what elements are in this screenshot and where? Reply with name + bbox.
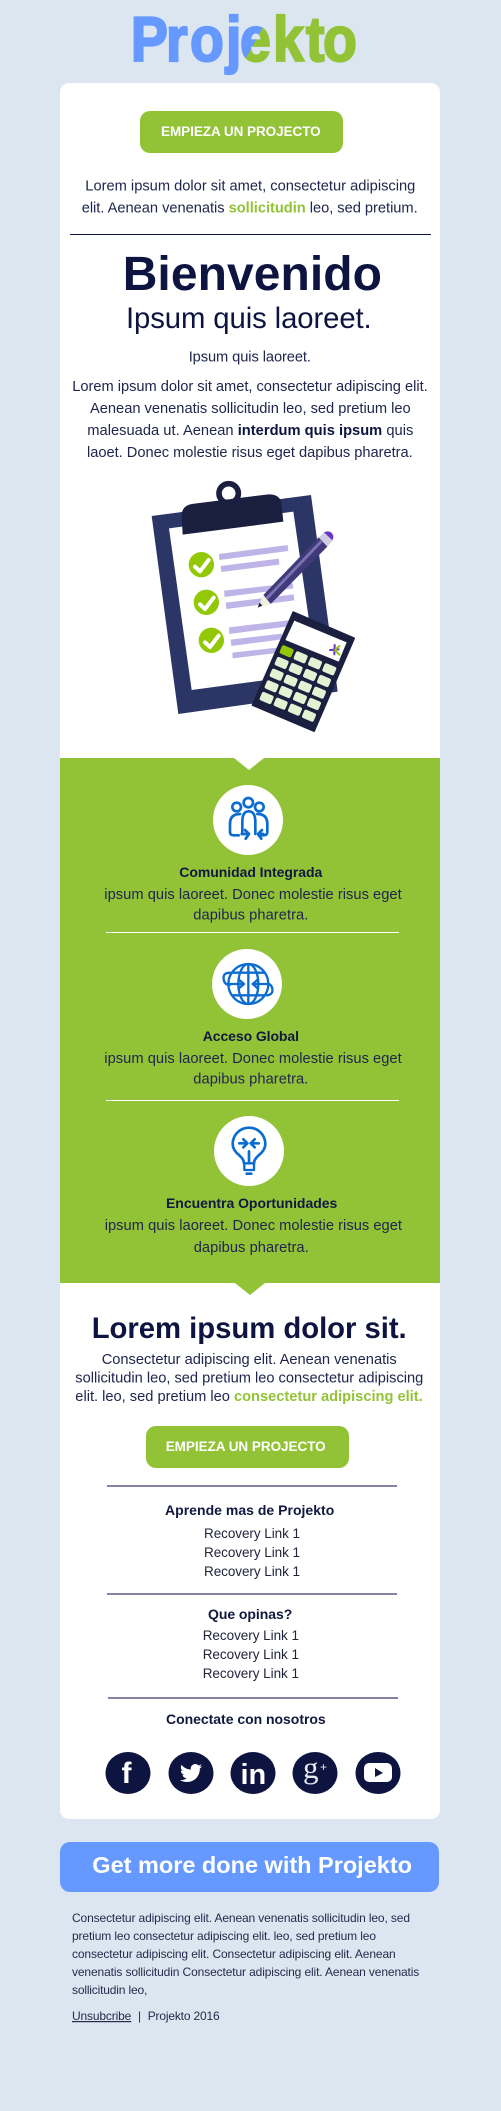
social icons row [106, 1750, 400, 1794]
text block: intro: Lorem ipsum dolor sit amet, consectetur adipiscing [85, 178, 415, 194]
icon: global access [212, 949, 282, 1019]
icon: twitter [168, 1752, 214, 1794]
illustration: clipboard, pencil and calculator [152, 484, 354, 731]
icon: youtube [356, 1752, 400, 1794]
footer text [72, 1911, 419, 1997]
heading: Bienvenido: Bienvenido [123, 248, 382, 301]
heading: Lorem ipsum dolor sit: Lorem ipsum dolor sit. [92, 1312, 407, 1345]
text block: second paragraph [75, 1352, 423, 1405]
text: feature two: ipsum quis laoreet. Donec molestie risus eget [104, 1051, 402, 1067]
icon: facebook: f [122, 1757, 132, 1790]
text: feature one: ipsum quis laoreet. Donec molestie risus eget [104, 887, 402, 903]
icon: linkedin: in [240, 1759, 266, 1791]
text block: second paragraph: elit. leo, sed pretium leo consectetur adipiscing elit. [75, 1389, 423, 1405]
panel: main white card [60, 83, 440, 1819]
text block: second paragraph: sollicitudin leo, sed pretium leo consectetur adipiscing [75, 1370, 423, 1386]
link list: Aprende mas de Projekto: Recovery Link 1 [204, 1526, 300, 1541]
icon: community [213, 785, 283, 855]
text: feature two: dapibus pharetra. [193, 1072, 308, 1088]
logo: Projekto: Projekto [131, 4, 357, 75]
text block: second paragraph: Consectetur adipiscing elit. Aenean venenatis [102, 1352, 397, 1368]
text block: intro: elit. Aenean venenatis sollicitudin leo, sed pretium. [82, 200, 418, 216]
footer text: Consectetur adipiscing elit. Aenean venenatis sollicitudin leo, sed [72, 1911, 410, 1925]
banner: get more done [60, 1842, 439, 1892]
text: feature two [104, 1028, 402, 1088]
icon: google plus: + [320, 1760, 327, 1774]
link list: Que opinas: Recovery Link 1 [203, 1666, 299, 1681]
footer text: consectetur adipiscing elit. Consectetur adipiscing elit. Aenean [72, 1947, 396, 1961]
text: feature two: Acceso Global [203, 1028, 299, 1044]
link list: Aprende mas de Projekto: Recovery Link 1 [204, 1545, 300, 1560]
text: feature three: ipsum quis laoreet. Donec molestie risus eget [105, 1218, 402, 1234]
icon: calculator [253, 612, 354, 731]
button: second call to action: EMPIEZA UN PROJECTO [166, 1439, 326, 1454]
link list: Aprende mas de Projekto: Recovery Link 1 [204, 1564, 300, 1579]
text block: welcome paragraph: malesuada ut. Aenean interdum quis ipsum quis [87, 423, 413, 439]
footer text: pretium leo consectetur adipiscing elit. leo, sed pretium leo [72, 1929, 376, 1943]
link list: Que opinas: Recovery Link 1 [203, 1628, 299, 1643]
link list: Que opinas: Recovery Link 1 [203, 1647, 299, 1662]
icon: pencil [258, 531, 333, 608]
text block: welcome paragraph: laoet. Donec molestie risus eget dapibus pharetra. [87, 445, 413, 461]
text block: welcome paragraph: Lorem ipsum dolor sit amet, consectetur adipiscing elit. [72, 379, 428, 395]
link list: Que opinas: Que opinas? [208, 1606, 292, 1622]
text block: welcome paragraph: Aenean venenatis sollicitudin leo, sed pretium leo [90, 401, 411, 417]
footer links: Unsubcribe [72, 2009, 132, 2023]
icon: google plus [292, 1750, 338, 1794]
icon: google plus: g [303, 1750, 318, 1785]
footer text: sollicitudin leo, [72, 1983, 147, 1997]
text: feature one: dapibus pharetra. [193, 908, 308, 924]
text block: welcome paragraph [72, 379, 428, 461]
heading: Conectate con nosotros: Conectate con nosotros [166, 1711, 326, 1727]
text block: intro [82, 178, 418, 216]
link list: Aprende mas de Projekto: Aprende mas de Projekto [165, 1502, 334, 1518]
button: top call to action: EMPIEZA UN PROJECTO [161, 124, 321, 139]
link list: Aprende mas de Projekto [165, 1502, 334, 1579]
footer links [72, 2009, 220, 2023]
footer text: venenatis sollicitudin Consectetur adipiscing elit. Aenean venenatis [72, 1965, 419, 1979]
footer links: Projekto 2016 [148, 2009, 220, 2023]
panel: green features band [60, 758, 440, 1295]
icon: linkedin [230, 1752, 276, 1794]
text: feature three [105, 1195, 402, 1256]
banner: get more done: Get more done with Projekto [92, 1852, 412, 1878]
text: feature three: dapibus pharetra. [194, 1240, 309, 1256]
text: feature one: Comunidad Integrada [179, 864, 323, 880]
icon: light bulb [214, 1116, 284, 1186]
text: feature three: Encuentra Oportunidades [166, 1195, 338, 1211]
footer links: | [138, 2009, 141, 2023]
text: small subheading: Ipsum quis laoreet. [189, 350, 311, 366]
button: second call to action [146, 1426, 349, 1468]
subheading: Ipsum quis laoreet. [126, 302, 372, 335]
text: feature one [104, 864, 402, 924]
link list: Que opinas [203, 1606, 299, 1681]
icon: facebook [106, 1752, 150, 1794]
button: top call to action [140, 111, 343, 153]
